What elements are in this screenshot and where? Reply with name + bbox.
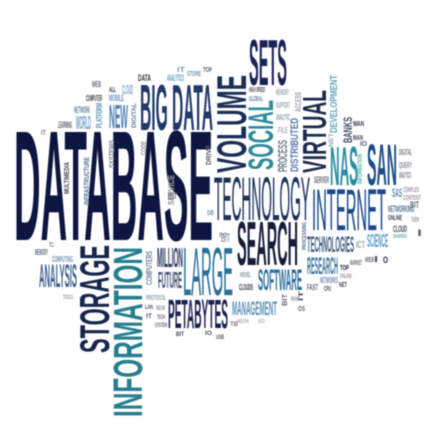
word cloud: ANALYSIS: [39, 258, 77, 294]
small words: lower right: IT: [299, 290, 305, 301]
small words: upper left: DRIVE: [206, 145, 213, 165]
word cloud: RESEARCH: [307, 253, 338, 280]
small words: upper left: SERVICE: [167, 174, 176, 205]
small words: upper left: BIT: [168, 192, 177, 201]
word: INFORMATION: INFORMATION: [105, 247, 151, 417]
small words: center column: DISTRIBUTED: [289, 118, 301, 172]
small words: lower right: SEO: [258, 319, 265, 325]
small words: lower left: COMPUTERS: [145, 251, 154, 285]
small words: upper left: ANALYTICS: [167, 73, 184, 83]
small words: right edge: DIGITAL: [399, 148, 412, 157]
small words: right edge: [356, 148, 422, 251]
small words: lower right: ONLINE: [340, 274, 352, 280]
small words: right edge: SAS: [392, 186, 402, 200]
small words: center column: DEVELOPMENT: [329, 75, 340, 133]
small words: right edge: QUERY: [399, 161, 412, 170]
small words: lower right: TB: [230, 322, 239, 328]
small words: right edge: ONLINE: [388, 215, 402, 222]
small words: upper left: DIGITAL: [132, 103, 138, 128]
small words: lower right: OS: [298, 306, 305, 313]
word cloud: FUTURE: [158, 267, 182, 293]
small words: center column: SUPPORT: [276, 101, 290, 110]
small words: right edge: CLOUD: [393, 224, 407, 234]
small words: lower left: NEW: [156, 306, 165, 312]
small words: lower right: RAM: [291, 297, 299, 303]
small words: center column: MAN: [353, 135, 363, 142]
small words: lower right: FAST: [307, 283, 318, 292]
small words: lower right: TOP: [340, 265, 349, 272]
small words: upper left: NETWORK: [74, 105, 90, 115]
small words: upper left: IT: [41, 130, 47, 137]
word cloud: LARGE: [183, 234, 233, 310]
small words: lower right: BIT: [282, 293, 289, 306]
small words: upper left: LEARNING: [58, 120, 72, 130]
small words: lower right: CPU: [324, 286, 331, 293]
small words: upper left: COMPUTER: [86, 94, 102, 103]
small words: lower left: SYSTEM: [155, 323, 167, 329]
small words: lower left: TOOLS: [63, 295, 73, 301]
small words: upper left: IT: [177, 67, 186, 74]
small words: upper left: INFRASTRUCTURE: [84, 157, 91, 205]
small words: upper left: MULTIMEDIA: [64, 162, 71, 194]
small words: upper left: GB: [207, 210, 214, 217]
small words: center column: FILE: [278, 126, 288, 135]
word cloud: BIG DATA: [140, 71, 213, 144]
word cloud: NEW: [109, 98, 128, 135]
small words: lower right: CLOUDS: [239, 283, 253, 292]
small words: lower right: NETWORKS: [320, 276, 338, 285]
small words: lower left: IT: [146, 314, 152, 320]
small words: center column: IO: [360, 141, 368, 148]
small words: lower right: MODEL: [240, 272, 251, 279]
small words: lower right: [221, 222, 388, 328]
small words: lower left: [35, 233, 228, 341]
small words: upper left: CLOUD: [122, 82, 133, 97]
small words: right edge: CONTENT: [403, 195, 421, 202]
small words: lower left: BIT: [176, 332, 184, 338]
small words: center column: [249, 75, 368, 185]
small words: upper left: MOBILE: [109, 93, 124, 103]
small words: lower right: BIT: [221, 231, 230, 245]
small words: lower left: IO: [205, 331, 212, 337]
small words: right edge: ICT: [356, 240, 365, 251]
word cloud: SOFTWARE: [258, 264, 302, 297]
small words: lower left: USB: [216, 335, 224, 341]
small words: lower left: IT: [50, 241, 56, 247]
small words: lower left: LAN: [145, 305, 153, 311]
small words: center column: SERVER: [314, 175, 329, 185]
word cloud: SETS: [249, 26, 287, 99]
small words: upper left: TOP: [203, 67, 212, 74]
small words: lower right: MARKET: [350, 260, 362, 267]
small words: center column: INFORMATION: [358, 154, 364, 184]
small words: upper left: [41, 67, 214, 217]
small words: lower right: O: [383, 255, 388, 265]
small words: lower left: TECH: [157, 315, 165, 321]
small words: lower left: PROTOCOL: [146, 295, 166, 302]
small words: center column: HIGH SPEED: [249, 87, 265, 94]
small words: lower left: MEMORY: [35, 248, 48, 257]
small words: center column: ACCESS: [294, 92, 303, 112]
small words: center column: PROCESS: [275, 140, 290, 172]
word cloud: MANAGEMENT: [232, 299, 277, 320]
small words: upper left: STORE: [187, 71, 201, 78]
small words: right edge: TIER: [411, 217, 419, 224]
small words: lower right: MEDIA: [237, 319, 249, 325]
small words: upper left: ALL: [109, 87, 116, 94]
small words: upper left: DATA: [138, 73, 151, 83]
small words: upper left: WEB: [92, 80, 101, 89]
small words: upper left: CODE: [141, 141, 148, 155]
small words: lower right: PROCESSING: [302, 222, 308, 250]
small words: right edge: BIT: [410, 200, 419, 210]
small words: lower left: COMPUTING: [52, 255, 73, 264]
word cloud: MILLION: [157, 242, 183, 273]
small words: center column: WAN: [353, 121, 364, 128]
small words: right edge: COMPLEX: [403, 187, 419, 194]
small words: center column: BANKS: [341, 117, 355, 143]
small words: center column: NET: [329, 133, 335, 147]
word: STORAGE: STORAGE: [71, 245, 118, 353]
small words: lower left: PC: [219, 233, 228, 239]
small words: right edge: I: [417, 228, 422, 238]
small words: upper left: SYSTEMS: [109, 140, 116, 168]
small words: center column: GLOBAL: [249, 96, 263, 103]
small words: upper left: PLATFORM: [95, 103, 104, 128]
word: VIRTUAL: VIRTUAL: [296, 90, 333, 173]
small words: center column: ANALYTIC: [276, 113, 290, 122]
small words: lower right: WEB: [365, 257, 374, 264]
small words: lower right: I: [374, 255, 378, 264]
word cloud: PETABYTES: [168, 291, 228, 337]
word cloud: WORLD: [76, 113, 91, 133]
word: SOCIAL: SOCIAL: [242, 100, 281, 170]
small words: lower right: NET: [339, 282, 347, 289]
small words: right edge: SHARING: [393, 234, 407, 240]
small words: center column: MEMORY: [276, 88, 289, 97]
